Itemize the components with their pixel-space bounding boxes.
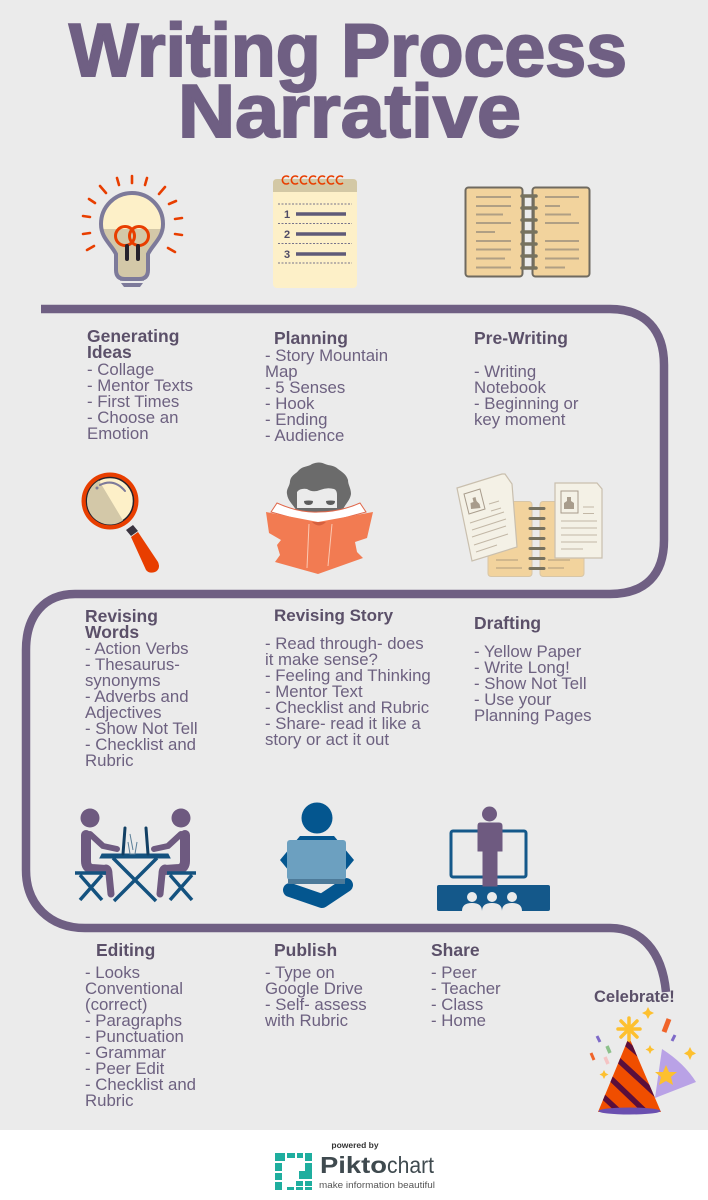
list: Share: - Class: [431, 995, 483, 1014]
heading: Editing: Editing: [96, 940, 155, 960]
heading: Celebrate: Celebrate!: [594, 988, 675, 1006]
list: Pre-Writing: Notebook: [474, 378, 546, 397]
list: Publish: [265, 963, 367, 1030]
list: Editing: - Looks: [85, 963, 140, 982]
list: Revising Words: [85, 639, 198, 770]
heading: Revising Story: Revising Story: [274, 606, 393, 625]
list: Editing: - Checklist and: [85, 1075, 196, 1094]
icon: numbered notepad: 1: [284, 209, 290, 221]
list: Drafting: - Show Not Tell: [474, 674, 587, 693]
list: Editing: Rubric: [85, 1091, 134, 1110]
list: Generating Ideas: - Choose an: [87, 408, 178, 427]
list: Generating Ideas: [87, 360, 193, 443]
list: Drafting: - Use your: [474, 690, 551, 709]
list: Generating Ideas: - Collage: [87, 360, 154, 379]
title: [68, 8, 627, 150]
list: Pre-Writing: key moment: [474, 410, 565, 429]
list: Editing: - Paragraphs: [85, 1011, 182, 1030]
icon: light bulb: [82, 174, 184, 287]
list: Revising Words: - Checklist and: [85, 735, 196, 754]
icon: two people at table: [75, 808, 196, 902]
list: Planning: [265, 346, 388, 445]
list: Planning: - Story Mountain: [265, 346, 388, 365]
list: Publish: - Type on: [265, 963, 335, 982]
icon: person reading book: [266, 462, 373, 574]
list: Drafting: [474, 642, 592, 725]
list: Pre-Writing: - Writing: [474, 362, 536, 381]
heading: Revising Words: Words: [85, 622, 139, 642]
heading: Share: Share: [431, 940, 480, 960]
icon: magnifying glass: [82, 472, 159, 573]
list: Pre-Writing: [474, 362, 578, 429]
list: Revising Story: story or act it out: [265, 730, 389, 749]
list: Editing: - Grammar: [85, 1043, 166, 1062]
list: Planning: Map: [265, 362, 298, 381]
icon: person with laptop: [280, 802, 354, 908]
list: Generating Ideas: - First Times: [87, 392, 179, 411]
list: Editing: [85, 963, 196, 1110]
list: Share: - Home: [431, 1011, 486, 1030]
list: Planning: - Ending: [265, 410, 328, 429]
list: Planning: - Audience: [265, 426, 344, 445]
heading: Revising Words: [85, 606, 158, 642]
list: Revising Story: - Read through- does: [265, 634, 424, 653]
heading: Publish: Publish: [274, 940, 337, 960]
list: Revising Story: [265, 634, 431, 749]
list: Revising Story: - Checklist and Rubric: [265, 698, 429, 717]
heading: Generating Ideas: [87, 326, 179, 362]
footer band: [0, 1130, 708, 1200]
title: Writing Process: [69, 8, 627, 92]
icon: draft papers on notebook: [456, 473, 603, 577]
icon: numbered notepad: 3: [284, 249, 290, 261]
footer logo: Piktochart: powered by: [331, 1140, 379, 1150]
icon: party hat and confetti: [590, 1007, 696, 1114]
list: Revising Story: it make sense?: [265, 650, 378, 669]
list: Publish: with Rubric: [265, 1011, 348, 1030]
heading: Revising Words: Revising: [85, 606, 158, 626]
list: Generating Ideas: Emotion: [87, 424, 149, 443]
list: Publish: - Self- assess: [265, 995, 367, 1014]
list: Pre-Writing: - Beginning or: [474, 394, 578, 413]
list: Revising Story: - Share- read it like a: [265, 714, 421, 733]
list: Share: [431, 963, 501, 1030]
list: Planning: - 5 Senses: [265, 378, 345, 397]
list: Editing: (correct): [85, 995, 147, 1014]
list: Revising Words: Rubric: [85, 751, 134, 770]
footer logo: Piktochart: Pikto: [320, 1152, 387, 1178]
list: Share: - Peer: [431, 963, 477, 982]
list: Revising Words: - Adverbs and: [85, 687, 189, 706]
footer logo: Piktochart: make information beautiful: [319, 1180, 435, 1191]
list: Revising Words: Adjectives: [85, 703, 161, 722]
icon: presenter and audience: [437, 806, 550, 911]
icon: numbered notepad: [273, 175, 357, 288]
list: Revising Words: - Show Not Tell: [85, 719, 198, 738]
footer logo: Piktochart: chart: [387, 1152, 435, 1178]
list: Revising Story: - Mentor Text: [265, 682, 363, 701]
heading: Planning: Planning: [274, 328, 348, 348]
list: Drafting: Planning Pages: [474, 706, 592, 725]
heading: Drafting: Drafting: [474, 613, 541, 633]
heading: Generating Ideas: Generating: [87, 326, 179, 346]
heading: Pre-Writing: Pre-Writing: [474, 328, 568, 348]
list: Planning: - Hook: [265, 394, 314, 413]
list: Revising Words: - Thesaurus-: [85, 655, 180, 674]
list: Revising Words: - Action Verbs: [85, 639, 189, 658]
icon: numbered notepad: 2: [284, 229, 290, 241]
list: Editing: Conventional: [85, 979, 183, 998]
list: Publish: Google Drive: [265, 979, 363, 998]
list: Drafting: - Yellow Paper: [474, 642, 581, 661]
list: Share: - Teacher: [431, 979, 501, 998]
list: Revising Story: - Feeling and Thinking: [265, 666, 431, 685]
list: Editing: - Punctuation: [85, 1027, 184, 1046]
list: Editing: - Peer Edit: [85, 1059, 164, 1078]
icon: open spiral notebook: [464, 186, 590, 278]
heading: Generating Ideas: Ideas: [87, 342, 132, 362]
list: Generating Ideas: - Mentor Texts: [87, 376, 193, 395]
list: Revising Words: synonyms: [85, 671, 161, 690]
list: Drafting: - Write Long!: [474, 658, 570, 677]
